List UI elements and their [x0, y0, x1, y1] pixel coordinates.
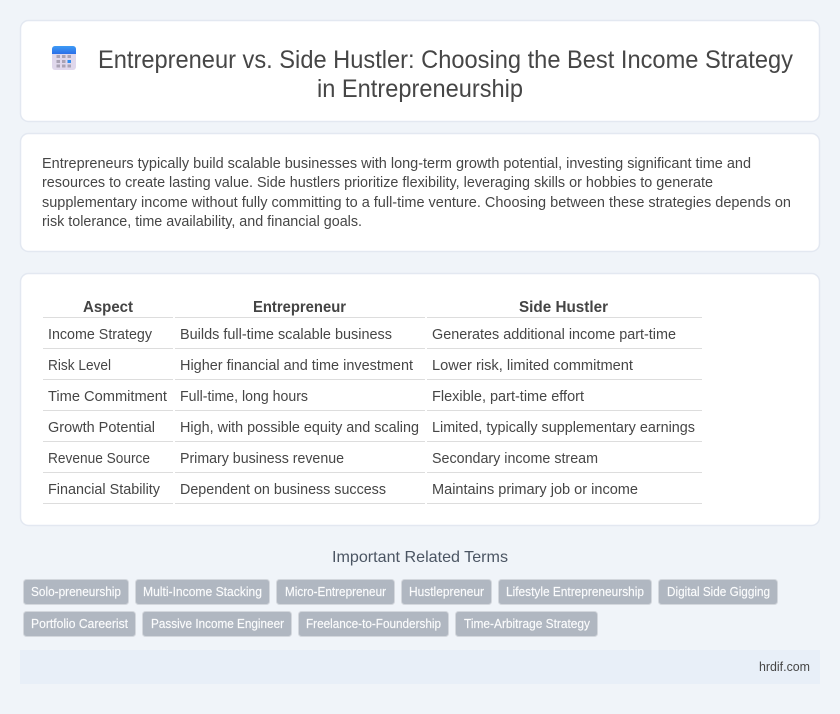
- text block: description: Entrepreneurs typically build scalable businesses with long-term growth potential, investing significant time and: [42, 156, 751, 172]
- row: financial stability: Financial Stability: [48, 482, 161, 498]
- table header: [83, 299, 608, 316]
- text block: description: [42, 156, 791, 230]
- row: income strategy: Income Strategy: [48, 327, 153, 343]
- tag: Digital Side Gigging: Digital Side Gigging: [667, 585, 770, 599]
- tag: Lifestyle Entrepreneurship: [498, 580, 652, 604]
- tag: Multi-Income Stacking: Multi-Income Stacking: [143, 585, 262, 599]
- table header: Aspect: [83, 299, 134, 316]
- text block: description: risk tolerance, time availability, and financial goals.: [42, 214, 362, 230]
- tag: Portfolio Careerist: Portfolio Careerist: [31, 617, 128, 631]
- tag: Time-Arbitrage Strategy: [456, 612, 598, 636]
- text block: description: resources to create lasting value. Side hustlers prioritize flexibility, leveraging skills or hobbies to generate: [42, 175, 713, 191]
- row: time commitment: Full-time, long hours: [180, 389, 308, 405]
- row: risk level: [48, 358, 633, 374]
- row: financial stability: Dependent on business success: [180, 482, 386, 498]
- tag: Solo-preneurship: Solo-preneurship: [31, 585, 121, 599]
- row: financial stability: Maintains primary job or income: [432, 482, 638, 498]
- row: income strategy: [48, 327, 676, 343]
- row: revenue source: Secondary income stream: [432, 451, 598, 467]
- title: Entrepreneur vs. Side Hustler: Choosing the Best Income Strategy: [98, 46, 793, 74]
- row: revenue source: Revenue Source: [48, 451, 150, 467]
- tag: Micro-Entrepreneur: Micro-Entrepreneur: [285, 585, 386, 599]
- row: time commitment: Flexible, part-time effort: [432, 389, 584, 405]
- table header: Side Hustler: [519, 299, 608, 316]
- tag: Freelance-to-Foundership: [298, 612, 448, 636]
- title: in Entrepreneurship: [317, 75, 523, 103]
- row: time commitment: Time Commitment: [48, 389, 167, 405]
- row: revenue source: [48, 451, 598, 467]
- row: growth potential: [48, 420, 695, 436]
- tag: Hustlepreneur: Hustlepreneur: [409, 585, 484, 599]
- heading: related terms: Important Related Terms: [332, 549, 508, 566]
- text block: description: supplementary income without fully committing to a full-time venture. Choosing between these strategies depends on: [42, 195, 791, 211]
- table header: Entrepreneur: [253, 299, 346, 316]
- footer: hrdif.com: [759, 659, 810, 674]
- row: growth potential: Limited, typically supplementary earnings: [432, 420, 695, 436]
- row: income strategy: Generates additional income part-time: [432, 327, 676, 343]
- tag: Time-Arbitrage Strategy: Time-Arbitrage Strategy: [464, 617, 591, 631]
- panel: header: [20, 20, 820, 122]
- footer: [20, 650, 820, 684]
- tag: Passive Income Engineer: [142, 612, 292, 636]
- tag: Digital Side Gigging: [658, 580, 778, 604]
- row: growth potential: High, with possible equity and scaling: [180, 420, 419, 436]
- related term tags: [24, 580, 778, 636]
- panel: comparison table: [20, 274, 820, 526]
- row: income strategy: Builds full-time scalable business: [180, 327, 392, 343]
- row: risk level: Higher financial and time investment: [180, 358, 413, 374]
- icon: calendar: [52, 46, 76, 70]
- row: risk level: Risk Level: [48, 358, 111, 374]
- row: financial stability: [48, 482, 638, 498]
- tag: Hustlepreneur: [402, 580, 492, 604]
- row: risk level: Lower risk, limited commitment: [432, 358, 633, 374]
- tag: Portfolio Careerist: [24, 612, 136, 636]
- row: revenue source: Primary business revenue: [180, 451, 344, 467]
- tag: Passive Income Engineer: Passive Income Engineer: [151, 617, 284, 631]
- tag: Solo-preneurship: [24, 580, 128, 604]
- tag: Micro-Entrepreneur: [276, 580, 394, 604]
- title: [98, 46, 793, 103]
- tag: Multi-Income Stacking: [136, 580, 270, 604]
- tag: Lifestyle Entrepreneurship: Lifestyle Entrepreneurship: [506, 585, 644, 599]
- row: growth potential: Growth Potential: [48, 420, 155, 436]
- tag: Freelance-to-Foundership: Freelance-to-Foundership: [306, 617, 441, 631]
- row: time commitment: [48, 389, 584, 405]
- panel: description: [20, 134, 820, 252]
